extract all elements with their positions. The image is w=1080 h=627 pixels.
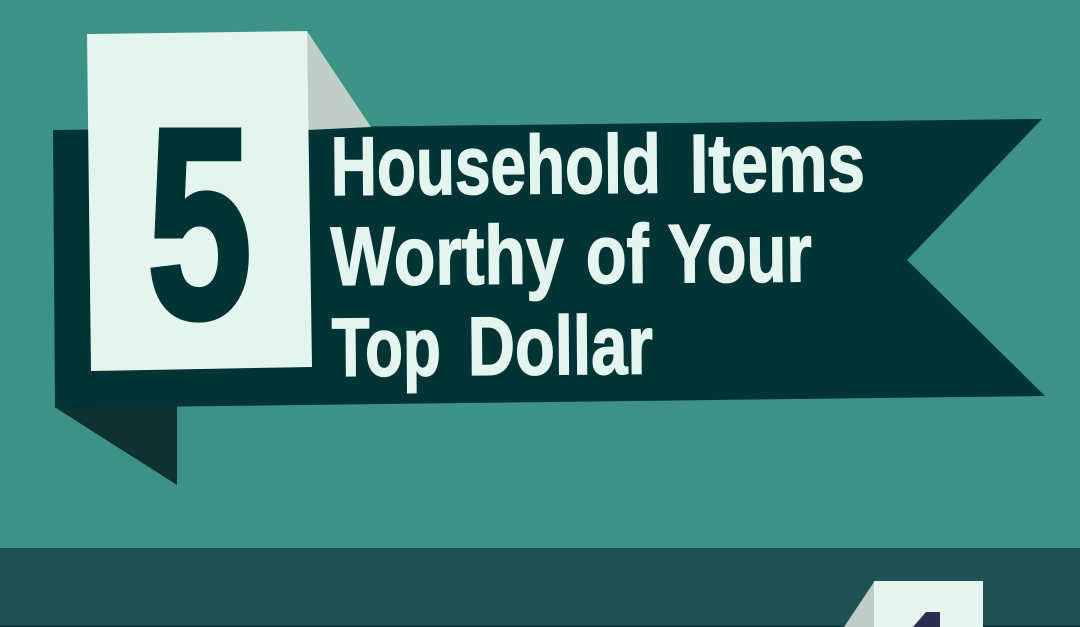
item 1 number tab: [844, 581, 983, 627]
title line 3: Top: [331, 300, 441, 394]
number tab: [87, 31, 312, 371]
title line 2: Worthy: [330, 208, 564, 303]
numeral 5: 5: [147, 73, 252, 375]
banner ribbon: [53, 119, 1045, 485]
ribbon fold: [56, 404, 177, 485]
title: [330, 116, 865, 394]
title line 1: Household: [330, 117, 661, 213]
number tab shadow: [307, 31, 371, 130]
title line 2: Your: [667, 206, 812, 300]
title line 3: Dollar: [467, 298, 653, 393]
title line 3: [331, 298, 653, 394]
title line 2: of: [585, 208, 649, 301]
numeral 1 top: [913, 612, 940, 627]
ribbon body: [53, 119, 1045, 408]
title line 1: Items: [689, 116, 865, 210]
next section band: [0, 548, 1080, 627]
title line 2: [330, 206, 812, 303]
